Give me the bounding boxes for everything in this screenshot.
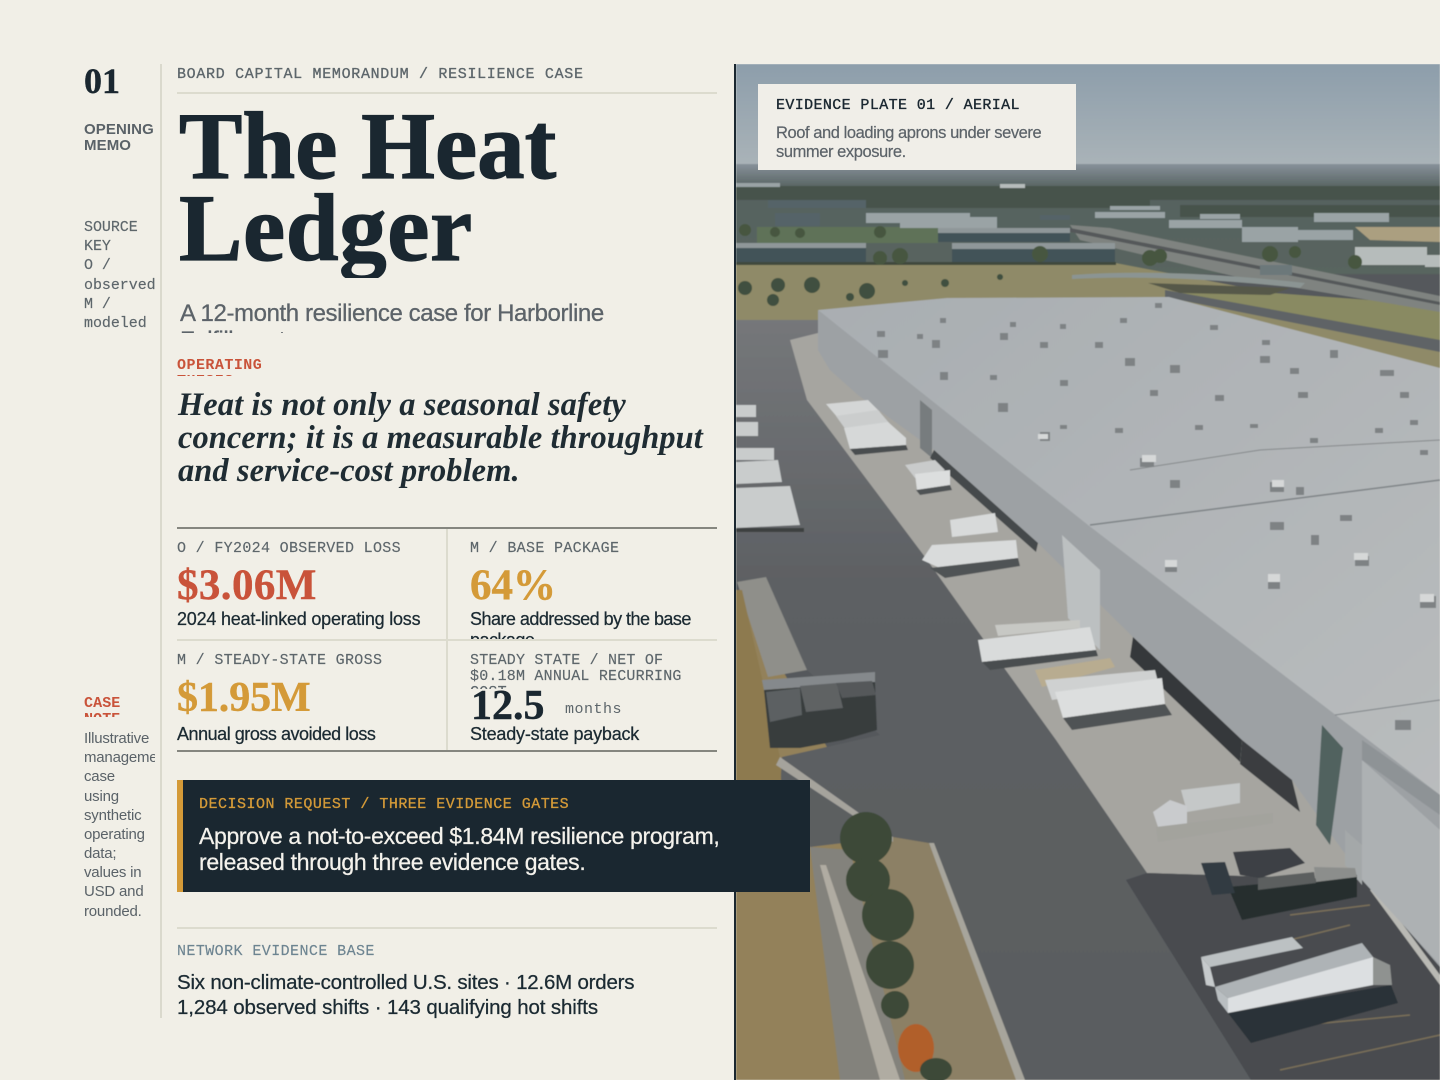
decision text: [198, 823, 719, 876]
source key: SOURCE: [84, 219, 138, 236]
case note text: operating: [84, 826, 145, 843]
evidence plate caption: [758, 84, 1076, 170]
metric: observed loss: $3.06M: [177, 562, 317, 609]
aerial photograph of warehouse: [736, 64, 1440, 1080]
case note text: USD and: [84, 883, 143, 900]
case note text: case: [84, 768, 115, 785]
section label: MEMO: [84, 137, 131, 154]
network text: Six non-climate-controlled U.S. sites · 12.6M orders: [177, 971, 634, 994]
asphalt: [736, 320, 1251, 1080]
thesis statement: [178, 387, 704, 489]
plate text: summer exposure.: [776, 143, 906, 161]
thesis statement: concern; it is a measurable throughput: [178, 420, 703, 456]
case note text: rounded.: [84, 903, 142, 920]
metric: observed loss: [177, 540, 420, 630]
warehouse wall: [818, 310, 1440, 967]
metric: observed loss: 2024 heat-linked operating loss: [177, 609, 420, 629]
case note text: data;: [84, 845, 116, 862]
metric: payback: months: [565, 701, 622, 718]
photo edge rule: [734, 64, 736, 1080]
plate text: Roof and loading aprons under severe: [776, 124, 1041, 142]
source key: O /: [84, 257, 111, 274]
decision label: DECISION REQUEST / THREE EVIDENCE GATES: [199, 796, 569, 813]
case note text: Illustrative: [84, 730, 149, 747]
network text: 1,284 observed shifts · 143 qualifying hot shifts: [177, 996, 598, 1018]
overpass: [1072, 273, 1305, 288]
distant buildings: [736, 183, 1389, 242]
case note text: using: [84, 788, 119, 805]
case note text: values in: [84, 864, 141, 881]
metric: steady-state gross: [176, 652, 382, 744]
subtitle: A 12-month resilience case for Harborline: [180, 300, 604, 327]
metrics grid: [176, 527, 717, 752]
planter: [850, 837, 1020, 1080]
apron concrete: [790, 330, 1364, 880]
accent bar: [177, 780, 183, 892]
grid rules: [177, 527, 717, 752]
footer divider: [177, 927, 717, 929]
metric: payback: Steady-state payback: [470, 724, 639, 744]
source key: [84, 219, 155, 332]
metric: payback: 12.5: [471, 683, 544, 729]
source key: observed: [84, 277, 155, 294]
left lot trailers: [736, 405, 800, 528]
decision text: Approve a not-to-exceed $1.84M resilience program,: [199, 823, 719, 849]
source key: M /: [84, 296, 111, 313]
decision text: released through three evidence gates.: [199, 849, 585, 875]
decision request box: [177, 780, 810, 892]
thesis statement: and service-cost problem.: [178, 453, 520, 489]
roof: [818, 297, 1440, 795]
metric: steady-state gross: $1.95M: [177, 675, 311, 721]
left rail rule: [160, 64, 162, 1018]
dark equipment: [1228, 875, 1357, 920]
thesis statement: Heat is not only a seasonal safety: [178, 387, 626, 423]
fields and highway: [757, 227, 938, 243]
metric: steady-state gross: Annual gross avoided loss: [177, 724, 375, 744]
title: Ledger: [179, 175, 473, 278]
network text: [177, 971, 634, 1018]
metric: payback: [470, 653, 682, 744]
metric: base package: Share addressed by the base: [470, 609, 691, 629]
rooftop units: [877, 303, 1436, 730]
metric: steady-state gross: M / STEADY-STATE GROSS: [177, 652, 382, 669]
section number: 01: [84, 61, 120, 101]
section label: OPENING: [84, 121, 154, 138]
case note text: [84, 730, 155, 920]
metric: payback: $0.18M ANNUAL RECURRING: [470, 668, 682, 685]
section label: [84, 121, 154, 154]
source key: modeled: [84, 315, 147, 332]
mechanical enclosure: [762, 672, 877, 748]
eyebrow: BOARD CAPITAL MEMORANDUM / RESILIENCE CASE: [177, 66, 584, 83]
distant trees band: [736, 186, 1440, 217]
header divider: [177, 92, 717, 94]
concrete strip: [737, 577, 807, 677]
metric: observed loss: O / FY2024 OBSERVED LOSS: [177, 540, 401, 557]
metric: base package: 64%: [470, 562, 556, 609]
loading dock trailers: [826, 400, 1398, 1043]
metric: base package: M / BASE PACKAGE: [470, 540, 619, 557]
plate label: EVIDENCE PLATE 01 / AERIAL: [776, 97, 1020, 114]
parking lot: [1126, 873, 1440, 1080]
case note text: synthetic: [84, 807, 141, 824]
dry grass ground: [736, 590, 1020, 1080]
network label: NETWORK EVIDENCE BASE: [177, 943, 375, 960]
title: [179, 105, 556, 278]
plate text: [776, 124, 1041, 161]
source key: KEY: [84, 238, 111, 255]
metric: base package: [470, 540, 691, 639]
